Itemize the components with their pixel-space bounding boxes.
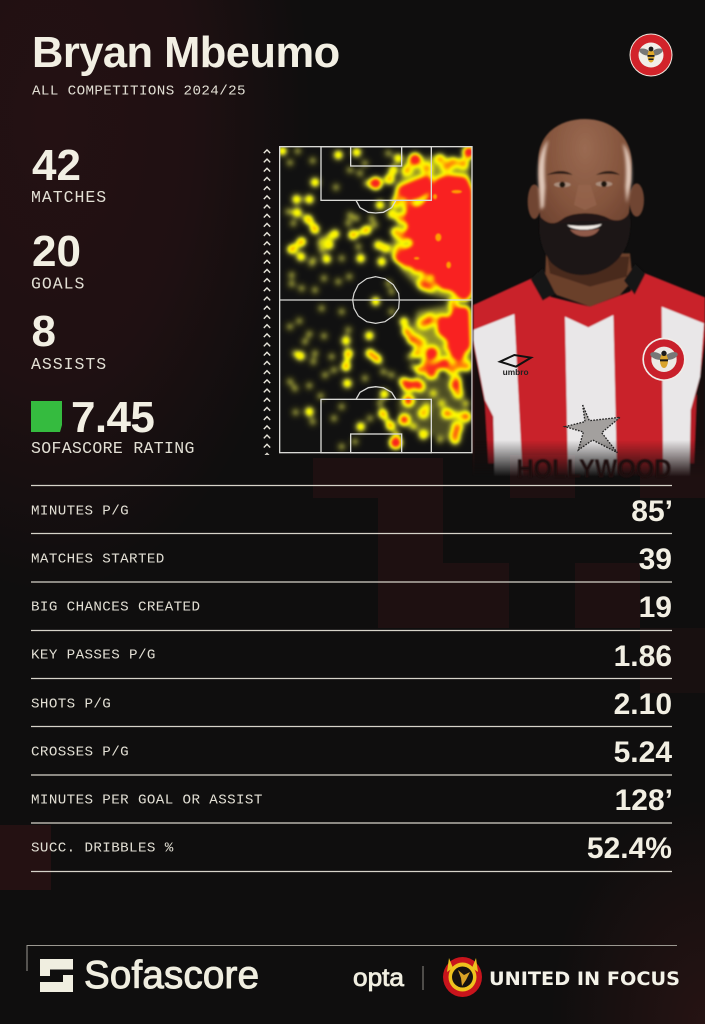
shirt white stripes <box>473 307 704 490</box>
row: minutes per game: MINUTES P/G <box>31 504 129 520</box>
icon: Brentford badge <box>630 34 672 76</box>
stat: assists: ASSISTS <box>31 355 107 374</box>
heatmap pitch <box>279 147 473 453</box>
row: minutes per goal or assist <box>31 784 673 817</box>
row: successful dribbles: 52.4% <box>587 832 672 865</box>
stat: assists: 8 <box>32 307 56 356</box>
beard <box>539 212 630 275</box>
nose <box>574 188 596 210</box>
row: matches started: 39 <box>639 543 672 576</box>
row: key passes: 1.86 <box>614 640 672 673</box>
row: shots <box>31 688 672 721</box>
head highlights <box>538 140 632 210</box>
row: shots: SHOTS P/G <box>31 696 111 712</box>
teeth <box>567 224 602 230</box>
row: minutes per goal or assist: 128’ <box>615 784 673 817</box>
heatmap blobs <box>282 151 473 447</box>
subtitle: ALL COMPETITIONS 2024/25 <box>32 84 246 100</box>
row: minutes per goal or assist: MINUTES PER GOAL OR ASSIST <box>31 792 263 808</box>
row: key passes <box>31 640 672 673</box>
row: matches started: MATCHES STARTED <box>31 552 165 568</box>
icon: Sofascore mark <box>40 959 73 992</box>
stats table rows <box>31 486 673 872</box>
icon: United in Focus crest <box>443 957 482 997</box>
row: successful dribbles <box>31 832 672 865</box>
stat: Sofascore rating <box>31 393 195 458</box>
head <box>538 118 632 224</box>
shirt club badge <box>642 338 686 381</box>
shirt star <box>565 405 620 453</box>
row: crosses: CROSSES P/G <box>31 744 129 760</box>
stat: goals <box>31 227 85 294</box>
stat: assists <box>31 307 107 374</box>
neck <box>545 253 633 307</box>
row: crosses <box>31 736 672 769</box>
ears <box>528 184 541 219</box>
row: matches started <box>31 543 672 576</box>
shirt <box>473 273 705 490</box>
logo: Opta: opta <box>353 964 404 992</box>
umbro logo <box>500 355 531 377</box>
row: shots: 2.10 <box>614 688 672 721</box>
shirt arm shadows <box>473 337 705 490</box>
row: crosses: 5.24 <box>614 736 672 769</box>
row: minutes per game: 85’ <box>631 495 673 528</box>
eyes <box>554 182 571 187</box>
collar <box>531 264 645 301</box>
logo: United in Focus <box>443 957 680 997</box>
footer separator <box>422 966 424 990</box>
title: Bryan Mbeumo <box>32 29 340 77</box>
moustache <box>555 214 613 225</box>
umbro logo: umbro <box>503 367 529 377</box>
row: big chances created: BIG CHANCES CREATED <box>31 600 200 616</box>
lower lip <box>570 228 599 236</box>
stat: matches: MATCHES <box>31 188 107 207</box>
red zone specks <box>414 190 462 268</box>
brows <box>547 171 620 175</box>
row: successful dribbles: SUCC. DRIBBLES % <box>31 840 174 856</box>
footer frame line <box>27 946 677 971</box>
logo: Sofascore: Sofascore <box>84 954 259 997</box>
pitch lines <box>280 147 472 453</box>
player photo <box>473 119 705 490</box>
stat: goals: 20 <box>32 227 81 276</box>
stat: Sofascore rating: SOFASCORE RATING <box>31 439 195 458</box>
row: minutes per game <box>31 495 673 528</box>
stat: matches <box>31 141 107 207</box>
attack direction chevrons <box>263 147 271 455</box>
row: big chances created: 19 <box>639 591 672 624</box>
row: key passes: KEY PASSES P/G <box>31 648 156 664</box>
stat: matches: 42 <box>32 141 81 190</box>
row: big chances created <box>31 591 672 624</box>
logo: United in Focus: UNITED IN FOCUS <box>489 968 680 990</box>
shirt sponsor: HOLLYWOOD <box>516 454 671 484</box>
stat: Sofascore rating: 7.45 <box>71 393 154 442</box>
icon: green rating square <box>31 401 62 432</box>
stat: goals: GOALS <box>31 274 85 294</box>
